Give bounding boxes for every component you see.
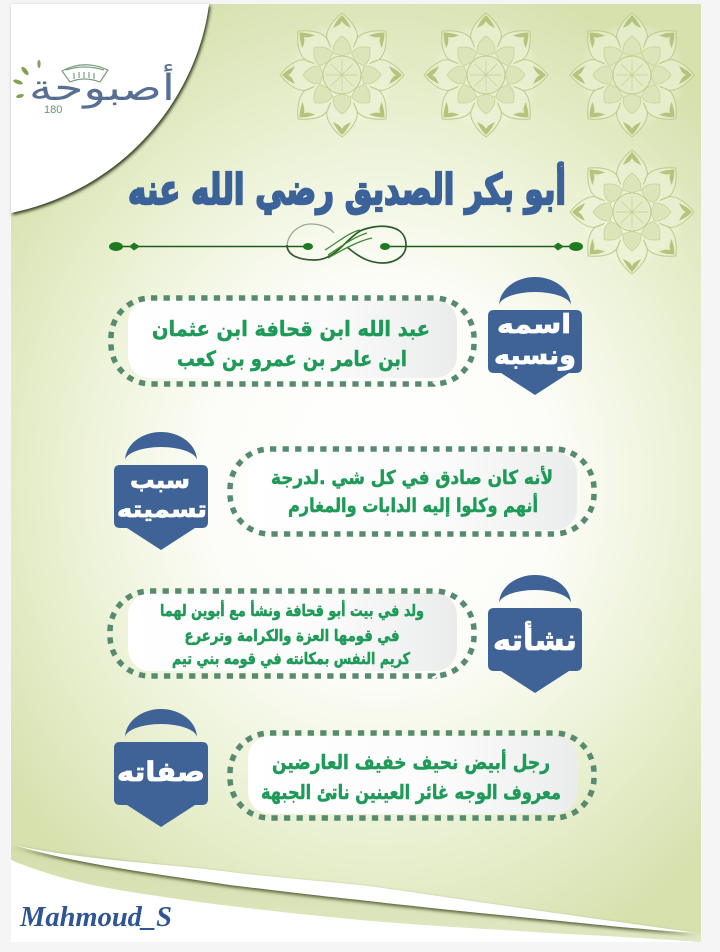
panel: reason for the name: لأنه كان صادق في كل شي .لدرجة xyxy=(271,466,553,489)
panel: description xyxy=(230,733,594,818)
panel: upbringing: ولد في بيت أبو قحافة ونشأ مع أبوين لهما xyxy=(160,600,424,621)
badge: name and lineage: ونسبه xyxy=(494,341,576,371)
panel: reason for the name: أنهم وكلوا إليه الدابات والمغارم xyxy=(288,493,538,517)
badge: reason for the name: تسميته xyxy=(117,497,207,523)
signature: Mahmoud_S xyxy=(19,902,172,933)
badge: description: صفاته xyxy=(117,757,205,788)
logo icon: crown xyxy=(62,65,108,82)
logo icon: sun rays xyxy=(13,60,41,99)
panel: upbringing: كريم النفس بمكانته في قومه بني تيم xyxy=(172,649,411,669)
panel: name and lineage xyxy=(111,298,474,384)
badge: reason for the name: سبب xyxy=(130,468,190,494)
bottom wave xyxy=(11,845,701,942)
panel: reason for the name xyxy=(230,449,594,534)
logo number: 180 xyxy=(44,104,62,116)
badge: description xyxy=(114,709,208,827)
panel: name and lineage: ابن عامر بن عمرو بن كعب xyxy=(177,347,407,371)
panel: description: رجل أبيض نحيف خفيف العارضين xyxy=(272,748,550,774)
badge: name and lineage: اسمه xyxy=(497,310,571,340)
panel: name and lineage: عبد الله ابن قحافة ابن عثمان xyxy=(152,317,430,341)
panel: upbringing: في قومها العزة والكرامة وترعرع xyxy=(184,626,400,646)
logo xyxy=(13,60,175,116)
floral ornaments xyxy=(280,13,694,274)
divider ornament xyxy=(109,224,583,263)
badge: upbringing: نشأته xyxy=(493,621,577,657)
badge: reason for the name xyxy=(114,432,208,550)
white corner panel xyxy=(11,4,209,213)
badge: upbringing xyxy=(488,575,582,693)
title: أبو بكر الصديق رضي الله عنه xyxy=(128,162,566,215)
panel: upbringing xyxy=(110,591,474,676)
logo wordmark: أصبوحة xyxy=(29,64,175,109)
badge: name and lineage xyxy=(488,277,582,395)
panel: description: معروف الوجه غائر العينين ناتئ الجبهة xyxy=(261,780,561,804)
